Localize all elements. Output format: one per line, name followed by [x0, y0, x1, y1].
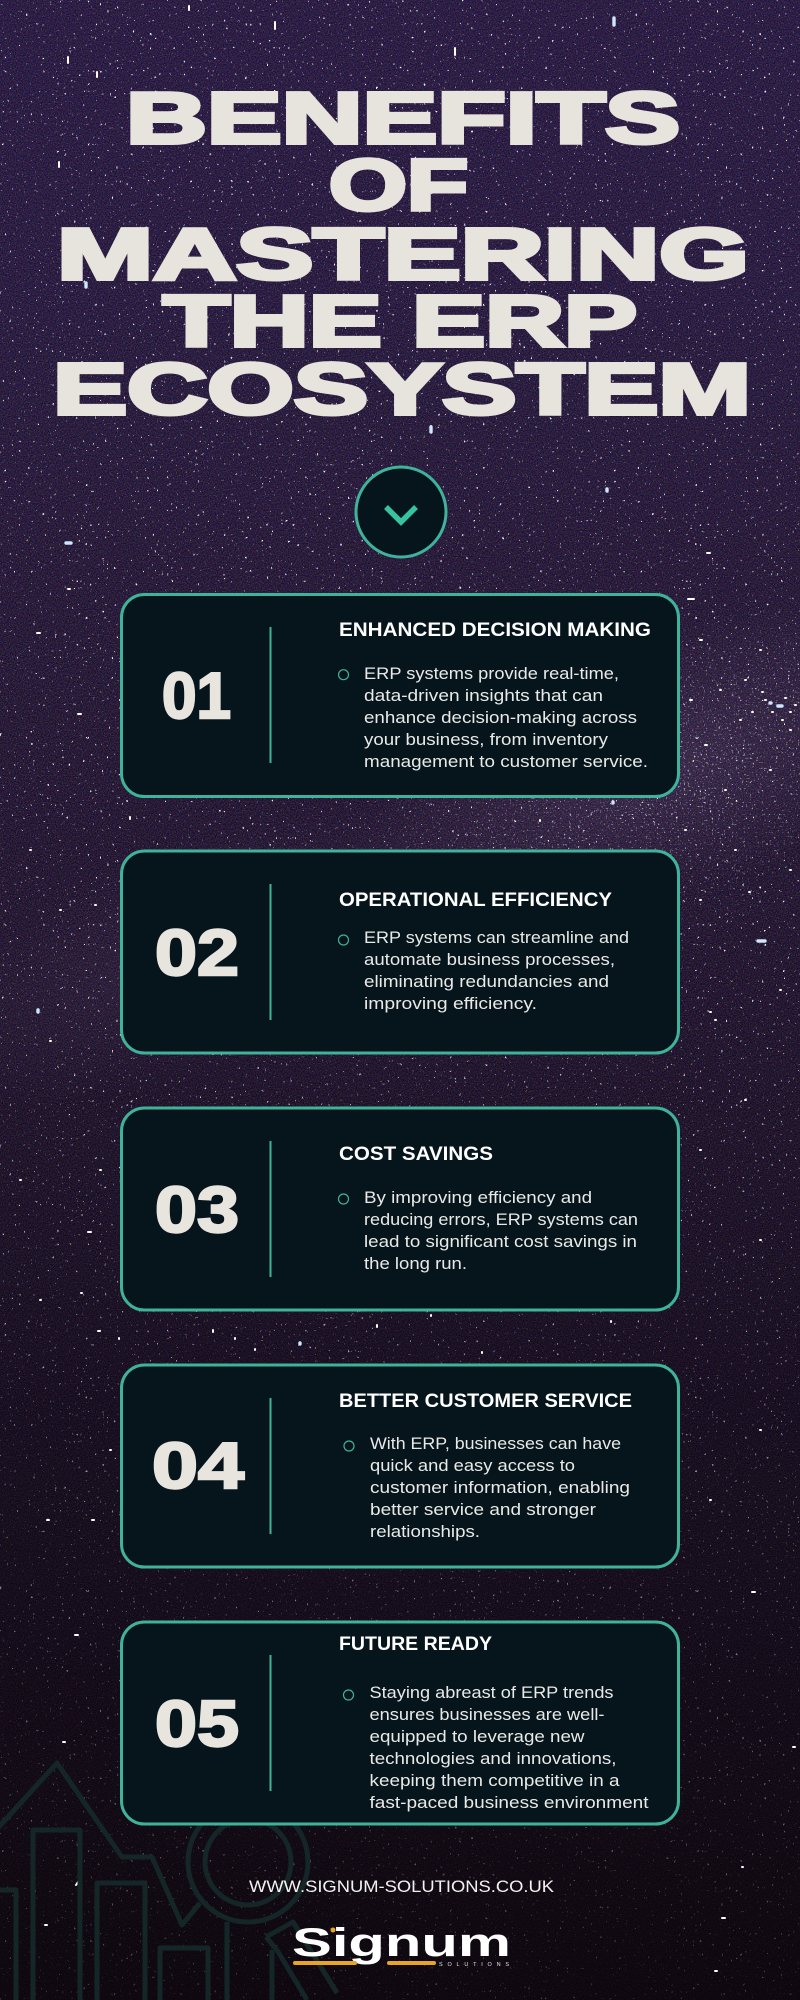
body text: the long run. — [364, 1255, 467, 1273]
heading: ENHANCED DECISION MAKING — [339, 619, 651, 641]
heading: BETTER CUSTOMER SERVICE — [339, 1390, 632, 1412]
logo underline bars — [293, 1928, 436, 1965]
bullet — [338, 935, 348, 945]
body text: technologies and innovations, — [370, 1750, 616, 1768]
body text: better service and stronger — [370, 1501, 597, 1519]
panel: 02 operational efficiency — [122, 851, 678, 1053]
title: OF — [329, 146, 468, 226]
bullet — [344, 1690, 354, 1700]
title: THE ERP — [163, 282, 637, 362]
logo: Signum Solutions — [292, 1921, 511, 1968]
title: MASTERING — [57, 215, 749, 295]
body text — [364, 1189, 638, 1273]
body text — [370, 1435, 630, 1541]
body text: improving efficiency. — [364, 995, 537, 1013]
panel: 03 cost savings — [122, 1108, 678, 1310]
title — [53, 79, 751, 430]
icon: chevron down in circle — [356, 467, 446, 557]
body text: With ERP, businesses can have — [370, 1435, 621, 1453]
body text — [364, 929, 629, 1013]
number 05: 05 — [155, 1687, 239, 1760]
body text — [364, 665, 648, 771]
number 04: 04 — [152, 1429, 244, 1502]
body text: relationships. — [370, 1523, 480, 1541]
panel: 04 better customer service — [122, 1365, 678, 1567]
title: BENEFITS — [126, 79, 680, 159]
number 01: 01 — [162, 659, 231, 732]
bullet — [338, 670, 348, 680]
panel: 05 future ready — [122, 1622, 678, 1824]
body text: ERP systems provide real-time, — [364, 665, 619, 683]
logo tagline: SOLUTIONS — [439, 1962, 509, 1968]
logo: Signum Solutions: Signum — [292, 1921, 511, 1965]
body text: your business, from inventory — [364, 731, 609, 749]
body text: ERP systems can streamline and — [364, 929, 629, 947]
body text: data-driven insights that can — [364, 687, 603, 705]
faint watermark: house, bar chart and magnifier outline — [0, 1763, 337, 2000]
website url: WWW.SIGNUM-SOLUTIONS.CO.UK — [249, 1877, 555, 1896]
body text: quick and easy access to — [370, 1457, 575, 1475]
bullet — [338, 1194, 348, 1204]
body text: automate business processes, — [364, 951, 615, 969]
title: ECOSYSTEM — [53, 350, 751, 430]
body text: reducing errors, ERP systems can — [364, 1211, 638, 1229]
body text: eliminating redundancies and — [364, 973, 609, 991]
body text: equipped to leverage new — [370, 1728, 585, 1746]
body text: customer information, enabling — [370, 1479, 630, 1497]
heading: COST SAVINGS — [339, 1143, 493, 1165]
bullet — [344, 1441, 354, 1451]
body text — [370, 1684, 649, 1812]
body text: keeping them competitive in a — [370, 1772, 620, 1790]
body text: By improving efficiency and — [364, 1189, 592, 1207]
number 03: 03 — [155, 1173, 239, 1246]
body text: management to customer service. — [364, 753, 648, 771]
heading: OPERATIONAL EFFICIENCY — [339, 889, 612, 911]
body text: ensures businesses are well- — [370, 1706, 604, 1724]
body text: Staying abreast of ERP trends — [370, 1684, 614, 1702]
panel: 01 enhanced decision making — [122, 594, 678, 796]
body text: lead to significant cost savings in — [364, 1233, 637, 1251]
heading: FUTURE READY — [339, 1633, 492, 1655]
number 02: 02 — [155, 916, 239, 989]
body text: enhance decision-making across — [364, 709, 637, 727]
body text: fast-paced business environment — [370, 1794, 649, 1812]
